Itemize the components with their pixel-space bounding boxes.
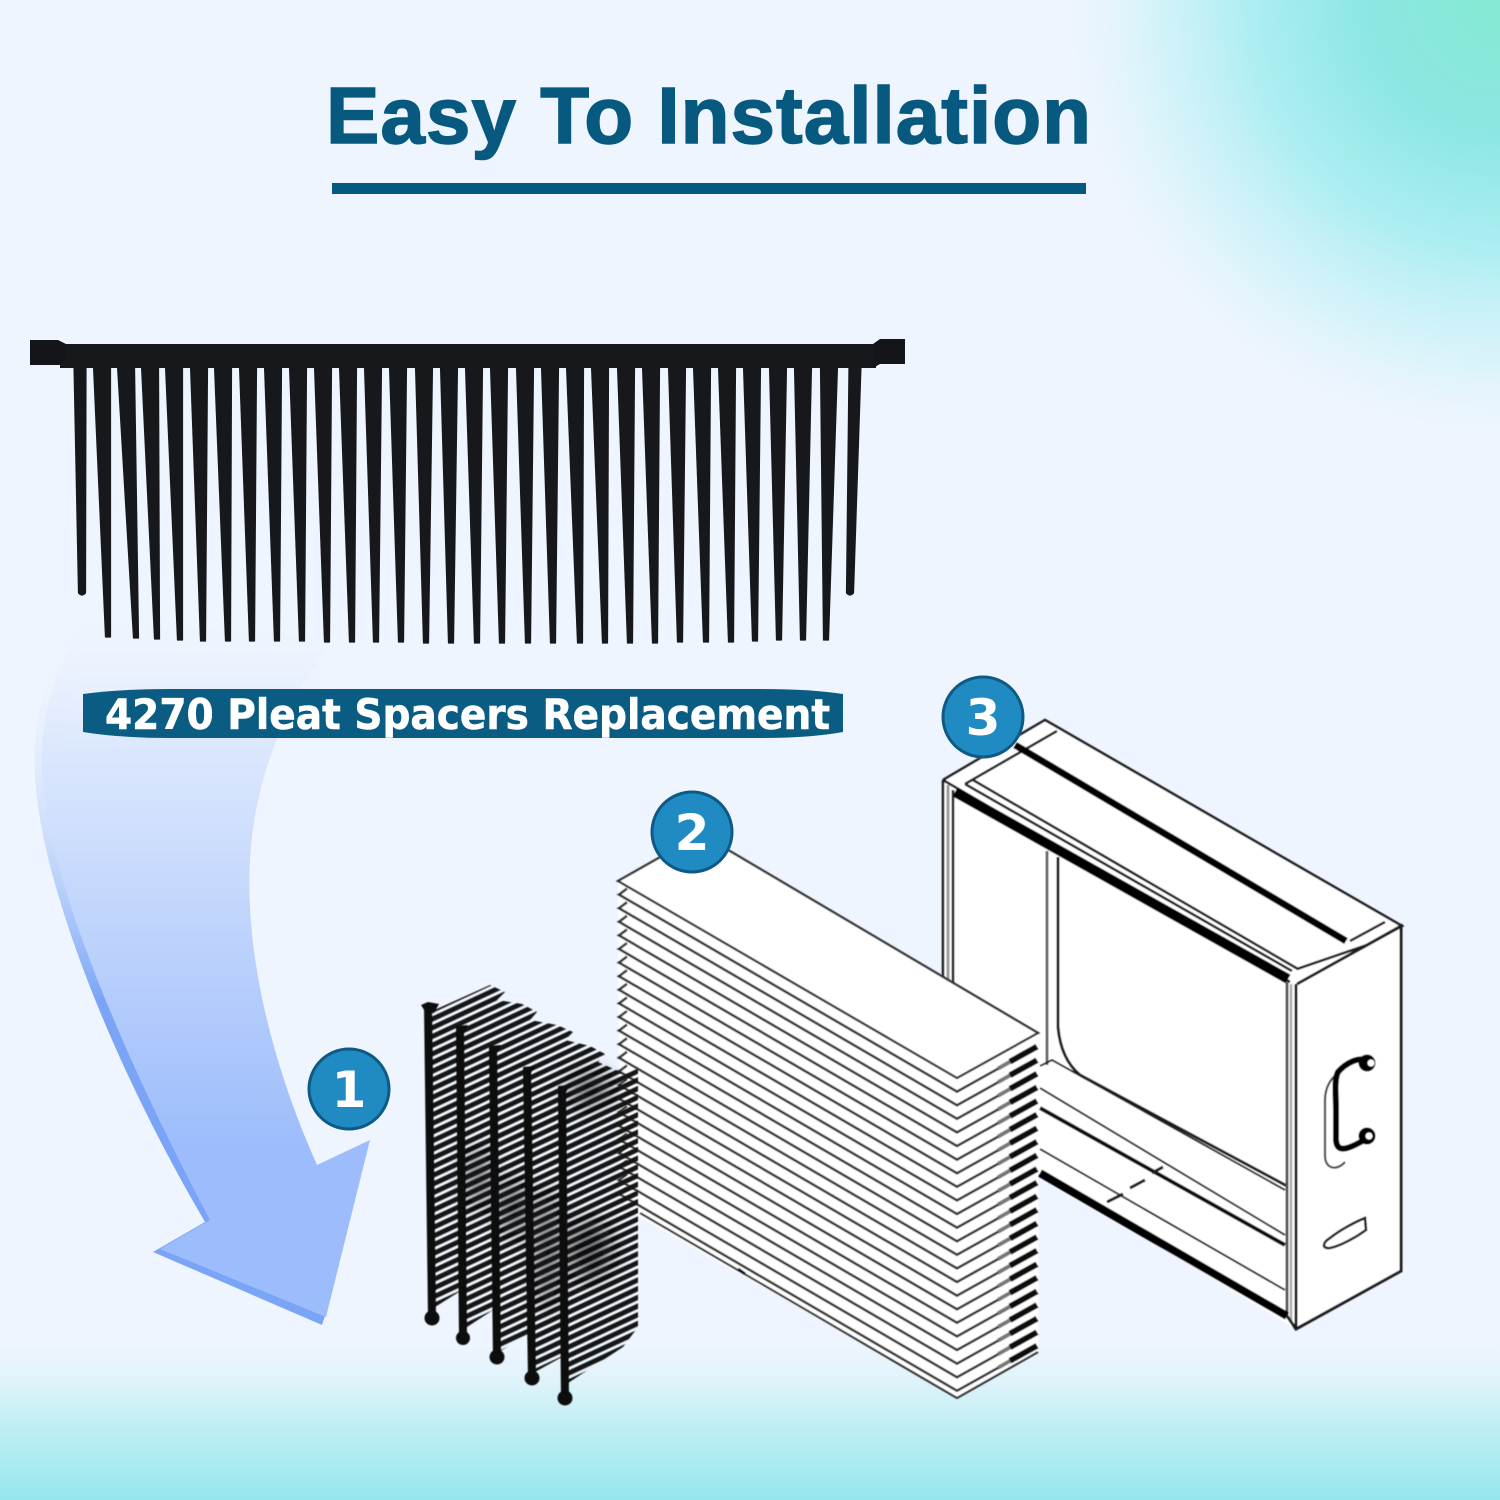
side panel: [1287, 926, 1401, 1329]
arrow: curved blue arrow: [35, 615, 370, 1325]
title: Easy To Installation: [326, 71, 1091, 160]
title underline: [332, 183, 1086, 194]
left and centre posts: [943, 780, 953, 990]
spacer teeth: [430, 985, 638, 1390]
banner: product name: 4270 Pleat Spacers Replacement: [105, 690, 830, 739]
left clip: [30, 340, 66, 365]
badge 3: [943, 677, 1023, 757]
spacer comb: pleat spacer product: [30, 339, 905, 643]
lower frame lines: [1040, 1088, 1285, 1235]
badge 3: 3: [966, 689, 1000, 747]
black rails: [1015, 745, 1346, 941]
pleat layers: [619, 889, 1037, 1391]
badge 1: [309, 1049, 389, 1129]
dark overlap shading: [466, 1074, 612, 1310]
part 2: stacked pleated filter media: [618, 834, 1038, 1398]
cabinet top outline: [943, 720, 1402, 984]
icon: side slot: [1324, 1218, 1366, 1248]
comb teeth: [74, 366, 861, 643]
spacer spines: [428, 1005, 565, 1398]
comb spine: [60, 344, 876, 368]
icon: handle: [1325, 1054, 1376, 1168]
front post: [1286, 982, 1288, 1316]
part 1: row of pleat spacers: [421, 985, 638, 1406]
bottom edge: [640, 1213, 1038, 1398]
badge 2: [652, 792, 732, 872]
right clip: [873, 339, 905, 368]
part 3: filter cabinet: [943, 720, 1402, 1329]
spacer end knobs: [421, 1002, 572, 1406]
top face: [618, 834, 1038, 1078]
badge 1: 1: [332, 1061, 366, 1119]
badge 2: 2: [675, 804, 709, 862]
